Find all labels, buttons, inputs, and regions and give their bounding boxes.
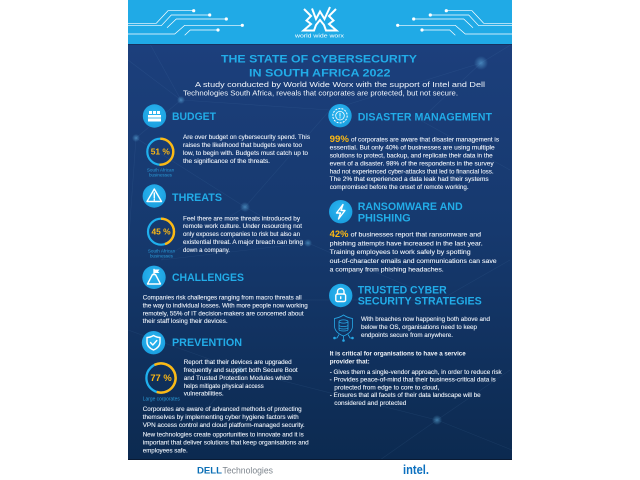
logo: Intel: intel. — [403, 463, 429, 477]
text: challenges: their staff losing their devices. — [143, 318, 228, 325]
logo: Dell Technologies — [197, 466, 273, 476]
text: prevention stat: frequently and support both Secure Boot — [184, 367, 298, 374]
icon: padlock — [329, 284, 352, 307]
chart: 51 percent ring: South African — [147, 168, 175, 172]
icon: gear with alert — [328, 104, 352, 127]
intro text: A study conducted by World Wide Worx with the support of Intel and Dell — [195, 80, 485, 89]
text: challenges: Companies risk challenges ranging from macro threats all — [143, 294, 302, 302]
text: budget: low, to begin with. Budgets must catch up to — [183, 150, 308, 157]
text: prevention details: New technologies create opportunities to innovate and it is — [143, 432, 304, 439]
panel: budget — [143, 104, 310, 178]
top header band — [128, 0, 512, 45]
text: trusted strategies intro: endpoints secure from anywhere. — [361, 332, 453, 339]
title: THE STATE OF CYBERSECURITY — [221, 53, 418, 65]
heading: ransomware and phishing: RANSOMWARE AND — [358, 201, 463, 213]
chart: 45 percent ring: South African — [148, 248, 176, 253]
text: disaster management: The 2% that experienced a data leak had their systems — [330, 176, 489, 183]
heading: ransomware and phishing — [358, 201, 463, 224]
text: prevention details: Corporates are aware of advanced methods of protecting — [143, 406, 302, 413]
text: prevention stat: Report that their devices are upgraded — [184, 359, 292, 366]
heading: trusted cyber security strategies — [358, 285, 482, 307]
icon: warning triangle — [143, 184, 166, 208]
text: prevention details: important that deliver solutions that keep organisations and — [143, 440, 309, 447]
logo: Dell Technologies: DELL — [197, 466, 223, 476]
text: budget: raises the likelihood that budgets were too — [183, 142, 302, 149]
text: prevention stat: helps mitigate physical access — [184, 383, 264, 390]
text: service provider list — [330, 350, 502, 407]
chart: 77 percent ring: 77 % — [150, 372, 172, 383]
text: disaster management: of corporates are aware that disaster management is — [351, 137, 499, 144]
text: disaster management: compromised before the onset of remote working. — [330, 184, 469, 191]
text: disaster management: 99% — [330, 134, 349, 144]
chart: 45 percent ring: businesses — [150, 253, 174, 258]
text: threats: existential threat. A major breach can bring — [183, 239, 303, 246]
text: trusted strategies intro: below the OS, organisations need to keep — [361, 324, 477, 331]
icon: lightning bolt — [329, 200, 352, 223]
chart: 51 percent ring: 51 % — [151, 146, 170, 156]
text: budget: Are over budget on cybersecurity spend. This — [183, 134, 310, 141]
panel: disaster management — [328, 104, 499, 191]
title: IN SOUTH AFRICA 2022 — [249, 67, 390, 79]
heading: ransomware and phishing: PHISHING — [358, 212, 411, 224]
text: service provider list: - Provides peace-of-mind that their business-critical data is — [330, 376, 496, 384]
text: prevention details: employees safe. — [143, 448, 188, 455]
icon: shield with check — [142, 331, 165, 354]
text: threats: only exposes companies to risk but also an — [183, 231, 300, 238]
text: trusted strategies intro — [361, 316, 490, 339]
text: prevention stat: and Trusted Protection Modules which — [184, 375, 292, 382]
heading: trusted cyber security strategies: SECURITY STRATEGIES — [358, 295, 482, 307]
text: disaster management: essential. But only 40% of businesses are using multiple — [330, 145, 495, 152]
text: service provider list: protected from edge to core to cloud, — [334, 384, 440, 392]
title — [221, 53, 418, 79]
logo: Dell Technologies: Technologies — [222, 466, 273, 476]
text: threats: down a company. — [183, 247, 230, 254]
text: ransomware and phishing: a company from phishing headaches. — [330, 266, 444, 274]
text: disaster management — [330, 134, 499, 191]
text: ransomware and phishing: phishing attempts have increased in the last year. — [330, 240, 483, 247]
icon: shield with database — [334, 315, 353, 341]
heading: prevention: PREVENTION — [172, 337, 242, 349]
heading: budget: BUDGET — [172, 111, 216, 123]
icon: budget — [143, 104, 166, 128]
navy main panel — [128, 44, 512, 460]
text: threats — [183, 215, 303, 254]
text: threats: remote work culture. Under resourcing not — [183, 223, 302, 230]
text: budget — [183, 134, 310, 165]
text: budget: the significance of the threats. — [183, 158, 270, 165]
heading: trusted cyber security strategies: TRUSTED CYBER — [358, 285, 447, 297]
panel: trusted cyber security strategies — [329, 284, 502, 407]
text: challenges: remotely, 55% of IT decision-makers are concerned about — [143, 310, 304, 317]
text: prevention stat — [184, 359, 298, 398]
text: ransomware and phishing: of businesses report that ransomware and — [351, 232, 481, 239]
text: ransomware and phishing: out-of-character emails and communications can save — [330, 258, 497, 265]
text: ransomware and phishing: 42% — [330, 229, 348, 239]
logo: world wide worx — [294, 7, 344, 40]
text: ransomware and phishing — [330, 229, 497, 274]
text: service provider list: considered and protected — [334, 400, 407, 407]
logo: world wide worx: world wide worx — [294, 34, 344, 40]
text: threats: Feel there are more threats introduced by — [183, 215, 301, 222]
text: prevention details: themselves by implementing cyber hygiene factors with — [143, 414, 299, 421]
text: challenges: the way to individual losses. With more people now working — [143, 302, 308, 309]
text: service provider list: - Ensures that all facets of their data landscape will be — [330, 392, 481, 399]
text: prevention details: VPN access control and cloud platform-managed security. — [143, 422, 305, 429]
text: prevention stat: vulnerabilities. — [184, 391, 224, 398]
intro text: Technologies South Africa, reveals that corporates are protected, but not secure. — [183, 88, 458, 98]
circuit lines left — [128, 9, 244, 35]
chart: 77 percent ring — [142, 359, 180, 403]
panel: threats — [143, 184, 303, 258]
text: prevention details — [143, 406, 309, 455]
intro text — [183, 80, 485, 98]
text: disaster management: had not experienced cyber-attacks that led to financial loss. — [330, 168, 494, 175]
text: service provider list: It is critical for organisations to have a service — [330, 350, 466, 358]
text: challenges — [143, 294, 308, 325]
chart: 77 percent ring: Large corporates — [143, 397, 180, 403]
panel: challenges — [142, 266, 308, 325]
heading: disaster management: DISASTER MANAGEMENT — [358, 111, 492, 123]
panel: prevention — [142, 331, 309, 455]
circuit lines right — [396, 9, 512, 35]
text: ransomware and phishing: Training employees to work safely by spotting — [330, 249, 471, 256]
text: trusted strategies intro: With breaches now happening both above and — [361, 316, 490, 323]
heading: challenges: CHALLENGES — [172, 272, 244, 284]
chart: 45 percent ring — [148, 219, 176, 258]
chart: 51 percent ring: businesses — [149, 172, 173, 178]
panel: ransomware and phishing — [329, 200, 497, 274]
chart: 51 percent ring — [147, 139, 175, 178]
text: service provider list: provider that: — [330, 358, 370, 366]
text: service provider list: - Gives them a single-vendor approach, in order to reduce risk — [330, 369, 502, 376]
icon: flag on mountain — [142, 266, 166, 289]
heading: threats: THREATS — [172, 192, 223, 204]
text: disaster management: event of a disaster. 98% of the respondents in the survey — [330, 160, 495, 167]
text: disaster management: solutions to protect, backup, and replicate their data in the — [330, 153, 493, 160]
chart: 45 percent ring: 45 % — [151, 226, 171, 236]
